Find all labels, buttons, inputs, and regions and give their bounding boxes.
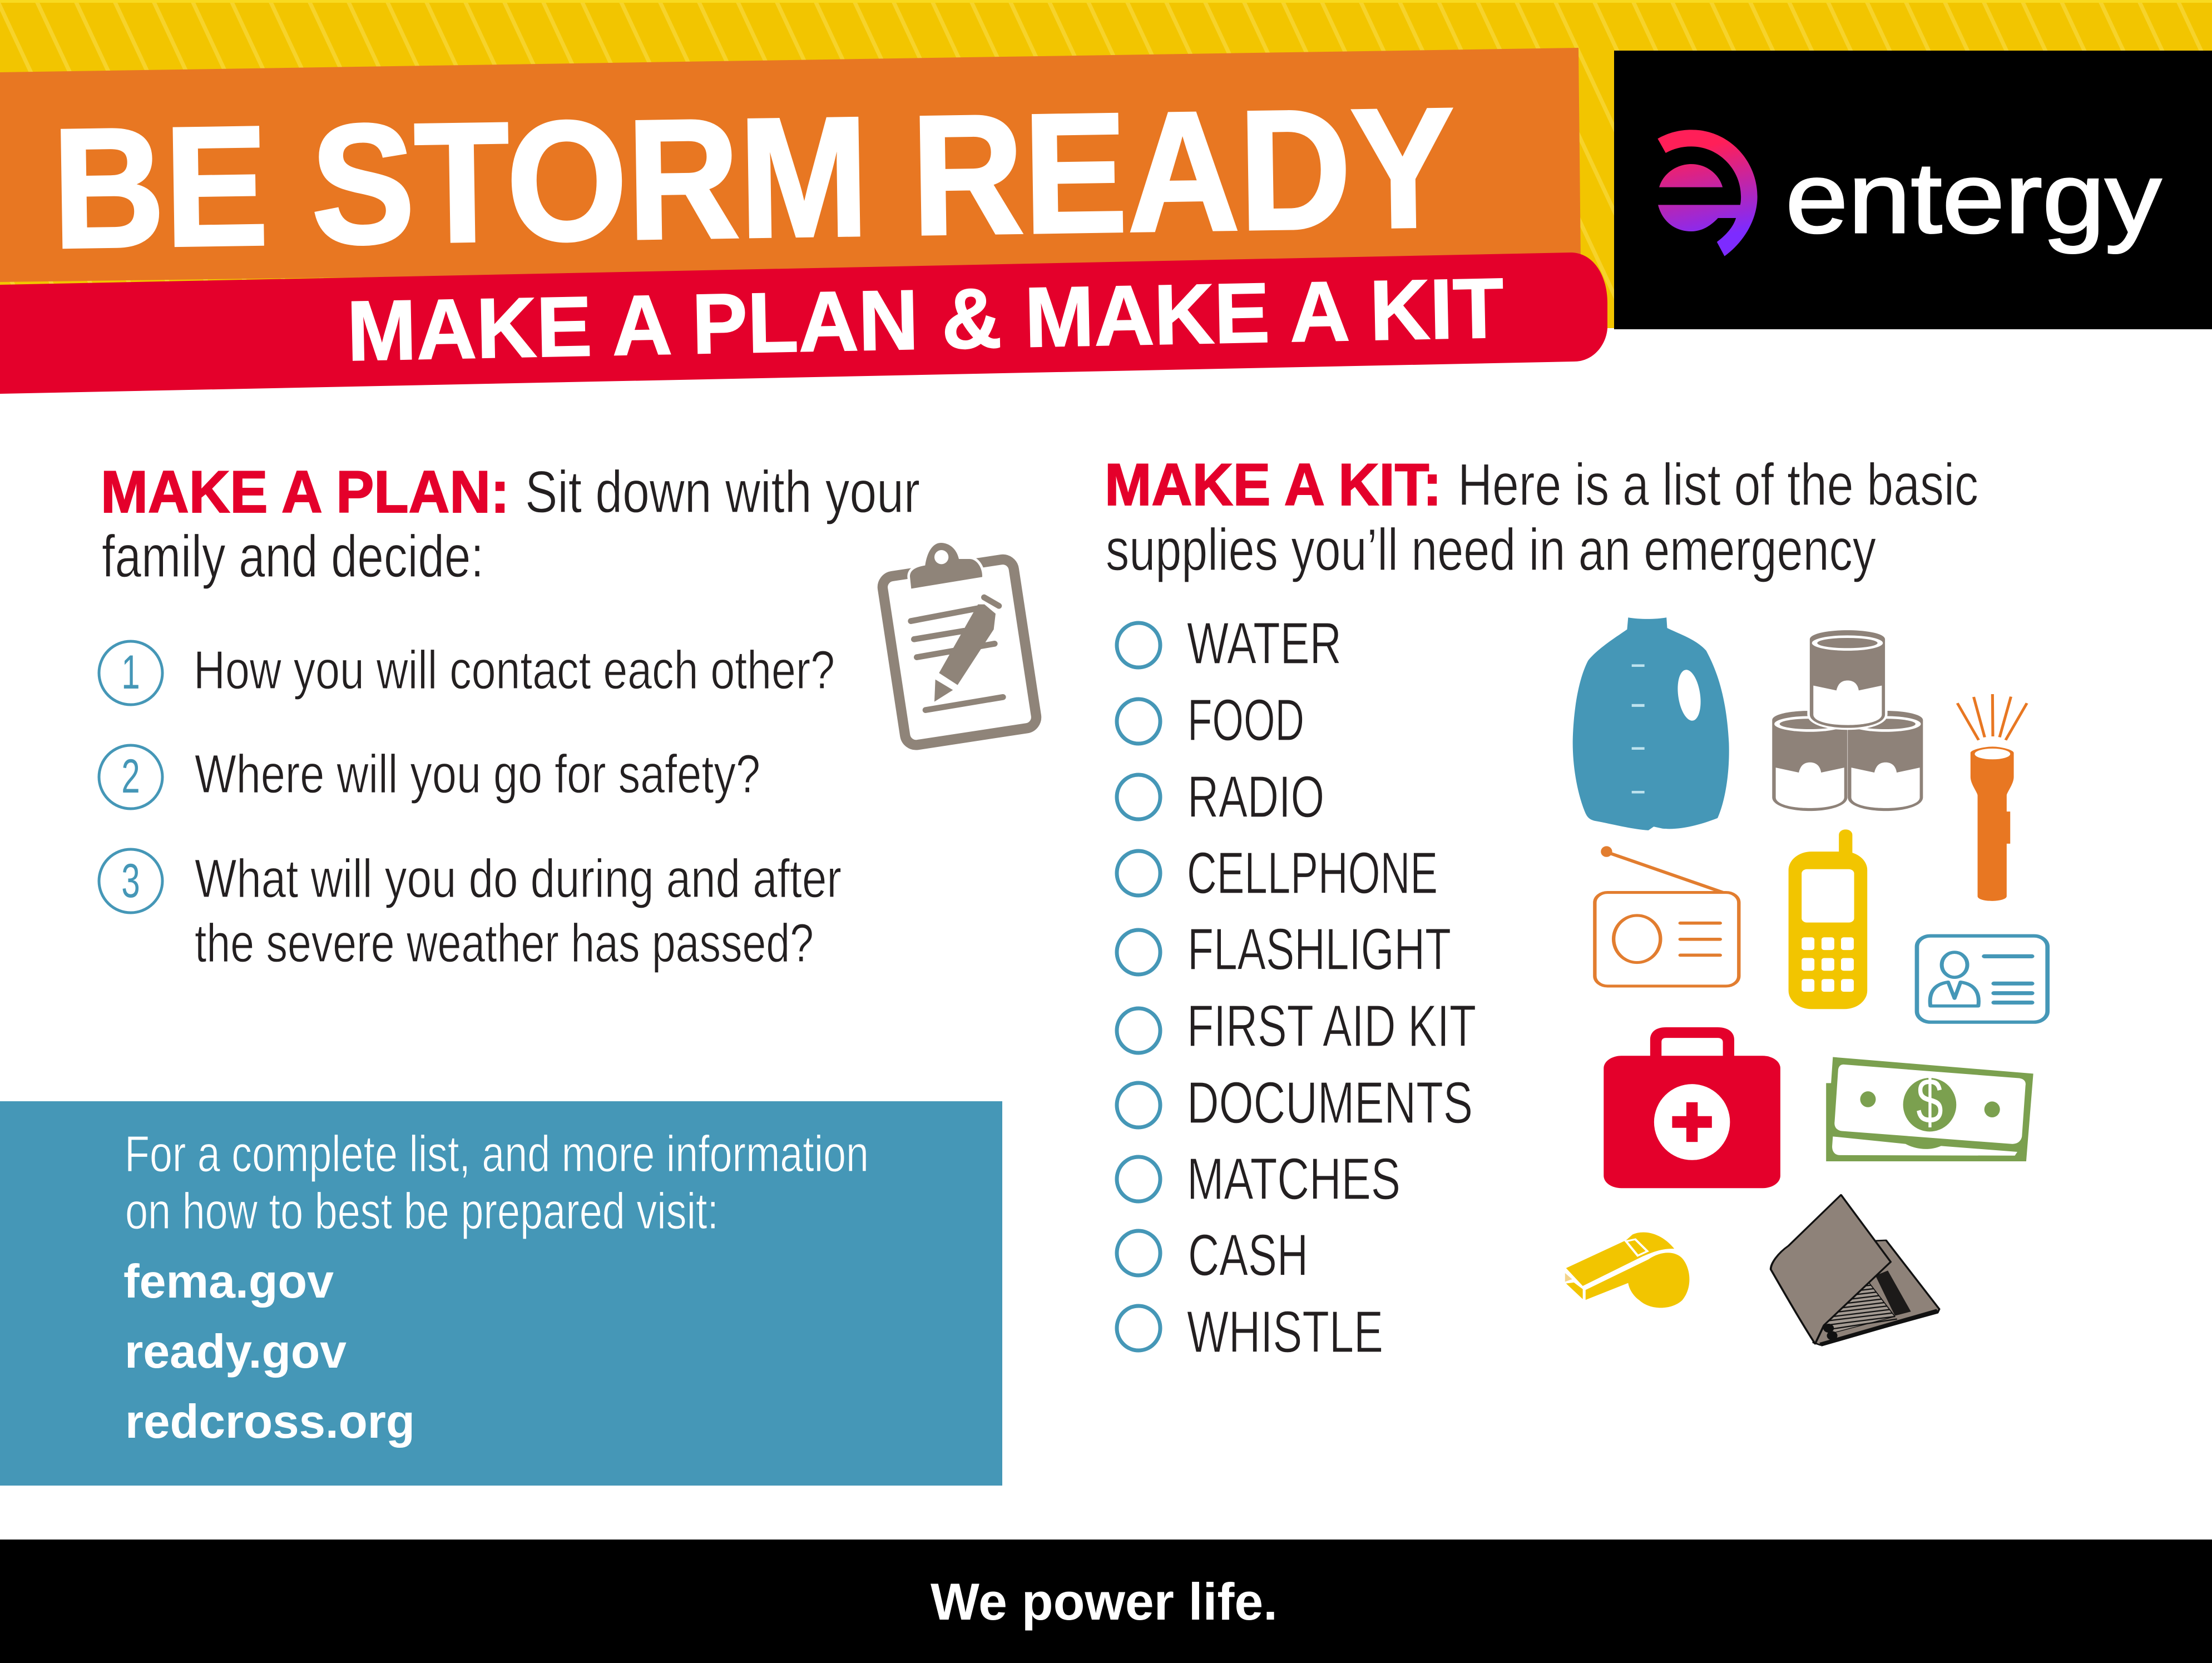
checklist: FOOD: [1187, 687, 1304, 753]
checklist: FLASHLIGHT: [1187, 917, 1451, 982]
plan item 1: [99, 640, 835, 705]
icon: food cans: [1772, 630, 1923, 811]
icon: radio: [1595, 846, 1739, 986]
icon: id card: [1917, 936, 2047, 1022]
plan item 3: What will you do during and after: [195, 848, 842, 909]
title: BE STORM READY: [51, 72, 1456, 284]
checklist: CASH: [1188, 1222, 1308, 1288]
icon: cellphone: [1789, 829, 1867, 1009]
plan item 3: the severe weather has passed?: [195, 913, 814, 973]
icon: water jug: [1573, 617, 1729, 830]
icon: binder with documents: [1771, 1195, 1939, 1345]
icon: clipboard: [881, 543, 1038, 746]
info panel: [0, 1101, 1002, 1486]
kit icons upper group: [1573, 617, 2047, 1022]
icon: flashlight: [1957, 694, 2027, 901]
checklist: CELLPHONE: [1187, 840, 1438, 906]
make a plan heading: Sit down with your: [525, 458, 920, 525]
plan item 2: Where will you go for safety?: [195, 744, 760, 804]
checklist: FIRST AID KIT: [1187, 993, 1476, 1059]
plan item 2: 2: [121, 749, 140, 803]
subtitle: MAKE A PLAN & MAKE A KIT: [346, 260, 1505, 379]
make a kit heading: MAKE A KIT:: [1105, 451, 1442, 518]
icon: cash: $: [1916, 1065, 1943, 1137]
make a kit heading: [1105, 451, 1978, 583]
info panel: For a complete list, and more information: [125, 1126, 869, 1182]
plan item 2: [99, 744, 760, 809]
make a plan heading: MAKE A PLAN:: [101, 458, 509, 525]
make a kit heading: supplies you’ll need in an emergency: [1106, 516, 1876, 583]
checklist: WHISTLE: [1187, 1299, 1383, 1365]
kit icons lower group: [1565, 1027, 2033, 1345]
icon: whistle: [1565, 1233, 1689, 1308]
link: redcross.org: redcross.org: [125, 1395, 415, 1448]
checklist: DOCUMENTS: [1187, 1070, 1473, 1136]
plan item 3: 3: [121, 854, 140, 908]
plan item 1: 1: [121, 645, 140, 699]
icon: first aid kit: [1604, 1027, 1780, 1188]
icon: cash: [1826, 1057, 2033, 1161]
tagline: We power life.: [931, 1572, 1278, 1631]
logo wordmark: entergy: [1785, 142, 2162, 254]
yellow striped header band: [0, 0, 2212, 328]
checklist: WATER: [1187, 611, 1342, 676]
make a kit heading: Here is a list of the basic: [1458, 451, 1978, 518]
logo panel: [1614, 51, 2212, 329]
footer band: [0, 1540, 2212, 1663]
plan item 3: [99, 848, 842, 973]
orange title banner: [0, 48, 1581, 284]
red subtitle banner: [0, 253, 1607, 394]
icon: entergy emblem: [1657, 130, 1758, 256]
plan item 1: How you will contact each other?: [194, 640, 835, 700]
make a plan heading: family and decide:: [102, 523, 484, 590]
info panel: on how to best be prepared visit:: [125, 1183, 719, 1240]
checklist: MATCHES: [1187, 1146, 1401, 1212]
make a plan heading: [101, 458, 920, 590]
checklist: RADIO: [1187, 764, 1324, 830]
link: ready.gov: ready.gov: [125, 1325, 347, 1378]
link: fema.gov: fema.gov: [123, 1255, 334, 1308]
checklist: [1117, 611, 1476, 1365]
